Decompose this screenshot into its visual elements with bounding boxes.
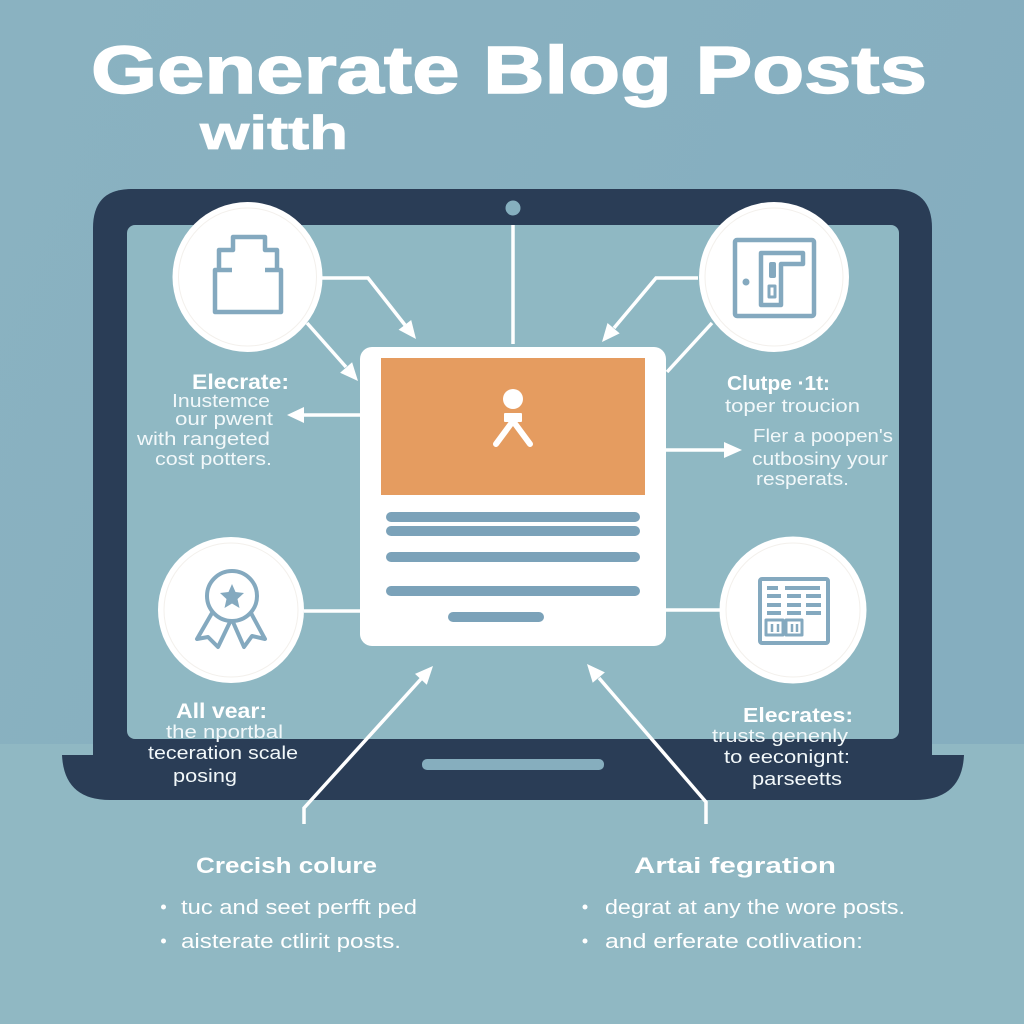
orange hero image xyxy=(381,358,645,495)
camera xyxy=(506,200,520,216)
text block: right top xyxy=(725,373,893,489)
text block: right top: resperats. xyxy=(756,469,849,489)
bottom column: right: degrat at any the wore posts. xyxy=(605,897,905,919)
connector lines and arrows xyxy=(287,225,742,824)
trackpad notch xyxy=(422,759,604,770)
text block: right bottom: parseetts xyxy=(752,769,842,789)
bottom column: left: aisterate ctlirit posts. xyxy=(181,931,401,953)
title: witth xyxy=(199,106,348,159)
text block: left top: our pwent xyxy=(175,409,273,429)
figure icon xyxy=(496,389,530,444)
bottom column: left xyxy=(161,853,417,953)
bottom column: right: and erferate cotlivation: xyxy=(605,931,863,953)
text block: right top: Fler a poopen's xyxy=(753,426,893,446)
icon circle: table panel xyxy=(720,536,866,684)
laptop screen xyxy=(127,225,899,739)
text block: left bottom: teceration scale xyxy=(148,743,298,763)
text block: left top xyxy=(136,371,289,469)
title xyxy=(91,33,927,159)
laptop base xyxy=(62,755,964,800)
text block: left top: Elecrate: xyxy=(192,371,289,394)
bottom column: right xyxy=(582,853,905,953)
bottom column: left: Crecish colure xyxy=(196,853,377,878)
text lines xyxy=(386,512,640,622)
card body xyxy=(360,347,666,646)
icon circle: award ribbon xyxy=(158,537,304,683)
text block: left top: with rangeted xyxy=(136,429,270,449)
text block: right bottom: to eeconignt: xyxy=(724,747,850,767)
text block: left bottom: posing xyxy=(173,766,237,786)
text block: right bottom: Elecrates: xyxy=(743,705,853,727)
text block: right bottom: trusts genenly xyxy=(712,726,848,746)
text block: left top: cost potters. xyxy=(155,449,272,469)
text block: left bottom: the nportbal xyxy=(166,722,283,742)
icon circle: door handle xyxy=(699,202,849,352)
bottom column: right: Artai fegration xyxy=(634,853,836,878)
laptop lid xyxy=(93,189,932,756)
icon circle: box stack xyxy=(172,202,322,352)
text block: left top: Inustemce xyxy=(172,391,270,411)
laptop xyxy=(62,189,964,800)
text block: right top: Clutpe ·1t: xyxy=(727,373,830,395)
text block: left bottom xyxy=(148,700,298,786)
text block: right top: cutbosiny your xyxy=(752,449,888,469)
bottom column: left: tuc and seet perfft ped xyxy=(181,897,417,919)
text block: right bottom xyxy=(712,705,853,789)
text block: right top: toper troucion xyxy=(725,396,860,416)
title: Generate Blog Posts xyxy=(91,33,927,108)
text block: left bottom: All vear: xyxy=(176,700,267,723)
central blog post card xyxy=(360,347,666,646)
